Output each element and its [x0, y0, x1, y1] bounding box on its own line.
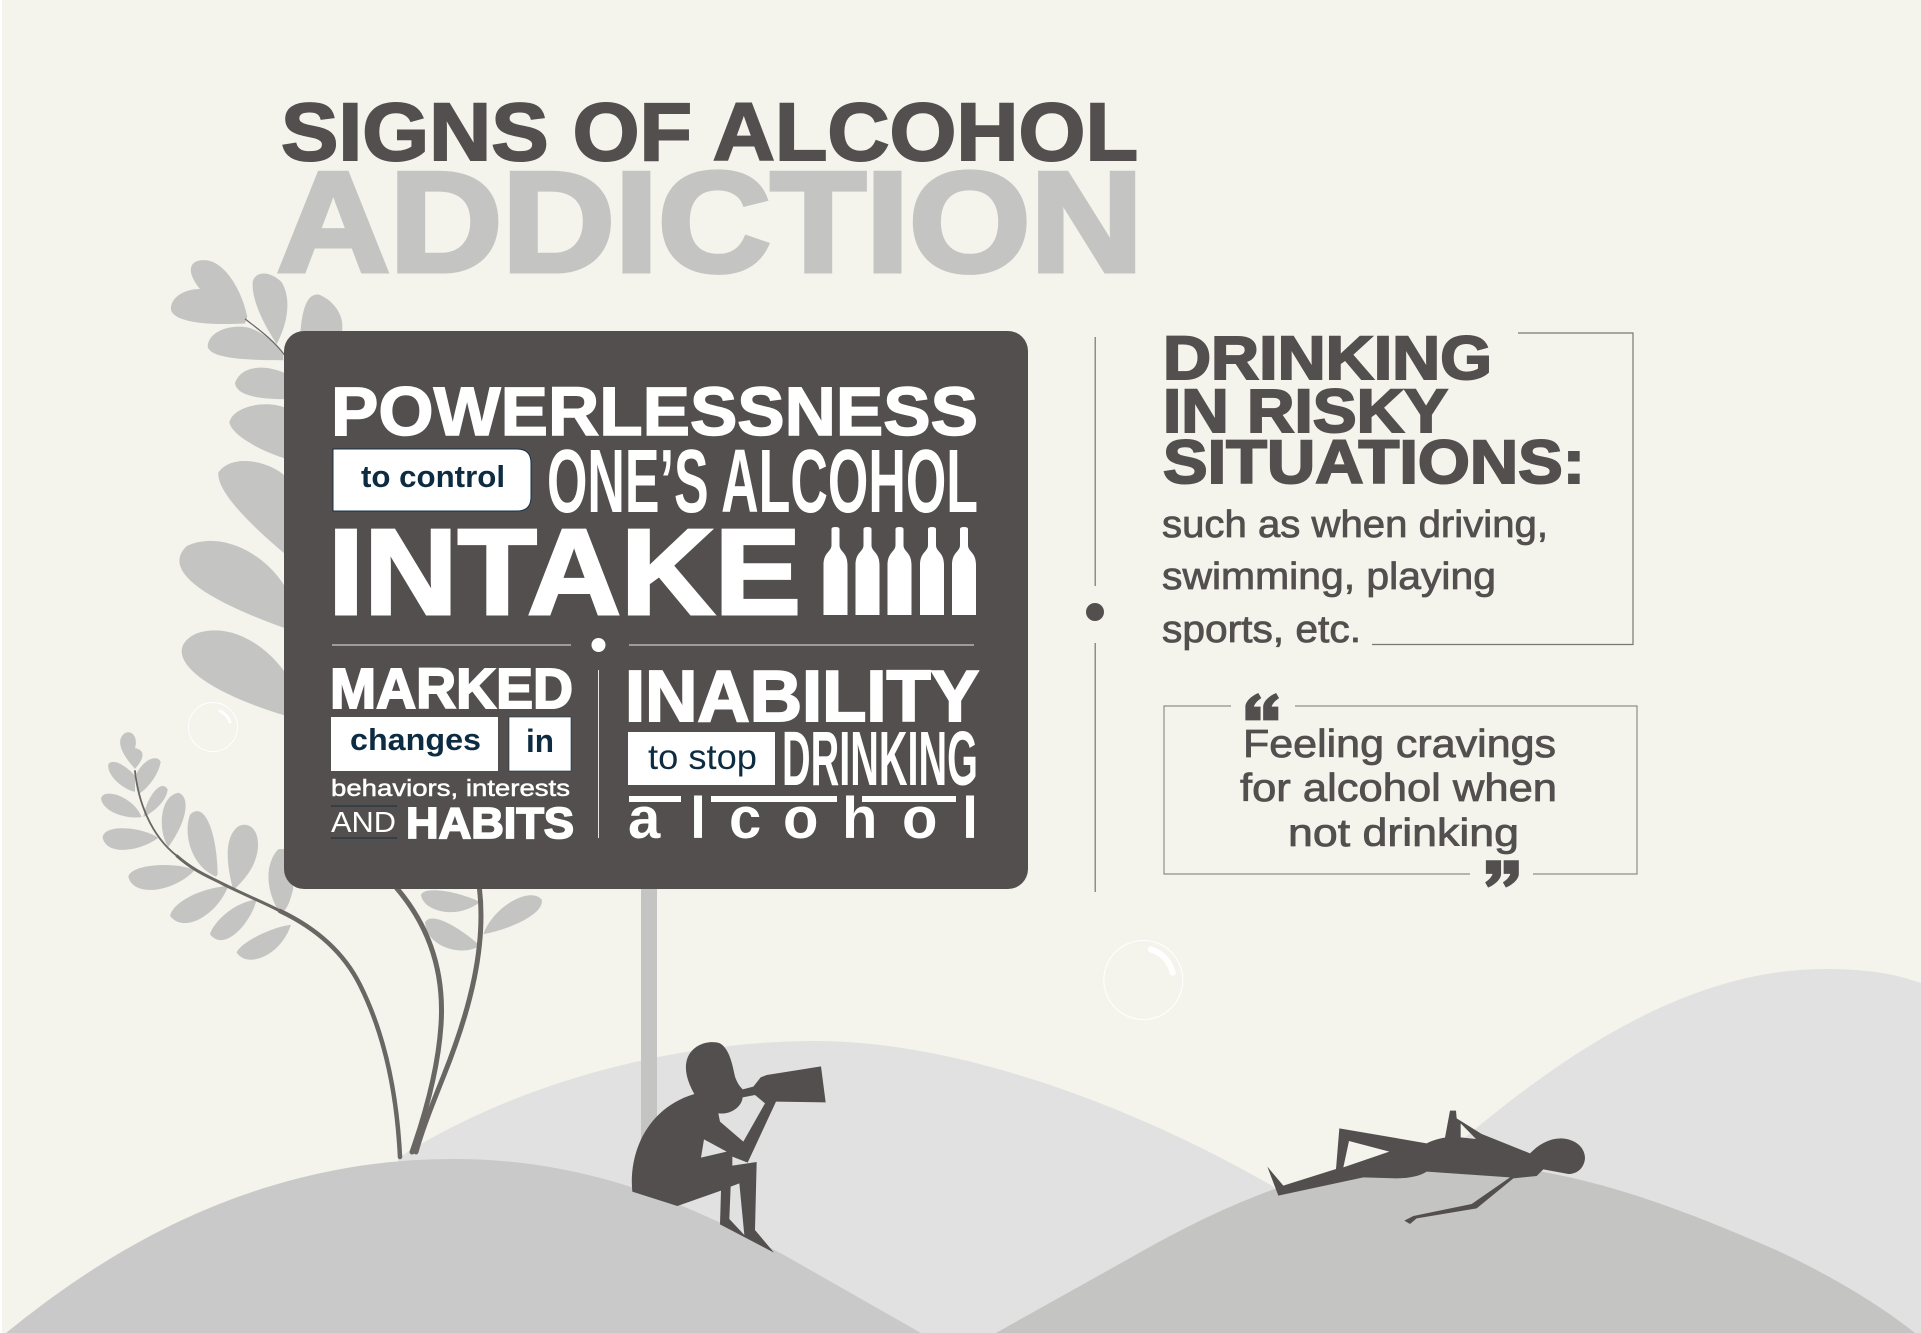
title — [277, 87, 1143, 302]
hill: front right — [996, 1160, 1915, 1333]
body text — [1162, 504, 1548, 651]
quote text — [1240, 723, 1557, 855]
label box: in — [509, 717, 571, 771]
heading: habits: HABITS — [406, 799, 574, 848]
plant: small leaves lower left — [101, 732, 542, 960]
text: and: AND — [331, 807, 396, 839]
divider with dot — [1086, 337, 1104, 892]
hill: front left — [6, 1159, 921, 1333]
heading: inability: INABILITY — [625, 657, 979, 737]
label box: to control: to control — [361, 459, 505, 494]
figure: crouching person drinking — [632, 1042, 826, 1253]
label box: to control — [333, 449, 531, 511]
icon: opening quote — [1245, 693, 1279, 720]
label box: changes: changes — [350, 722, 481, 757]
heading: marked: MARKED — [330, 657, 573, 721]
heading: drinking: DRINKING — [782, 716, 978, 802]
title: ADDICTION — [277, 143, 1143, 302]
heading: powerlessness: POWERLESSNESS — [331, 373, 978, 450]
panel: feeling cravings quote — [1164, 693, 1637, 888]
heading: intake: INTAKE — [328, 504, 801, 640]
hill: back centre — [398, 1041, 1300, 1333]
signpost — [641, 880, 657, 1160]
label box: to stop — [628, 732, 775, 785]
bubble: large — [1104, 940, 1183, 1020]
bubble: small — [188, 702, 238, 752]
heading: DRINKING — [1163, 324, 1492, 392]
body text: such as when driving, — [1162, 504, 1548, 546]
quote text: for alcohol when — [1240, 767, 1557, 810]
body text: swimming, playing — [1162, 556, 1496, 598]
body text: sports, etc. — [1162, 609, 1361, 651]
word: alcohol with overline: alcohol — [628, 786, 978, 851]
icon: five bottles — [824, 527, 976, 615]
plant stems — [135, 771, 481, 1157]
heading: SITUATIONS: — [1163, 428, 1585, 496]
label box: in: in — [526, 723, 554, 759]
quote text: not drinking — [1288, 812, 1519, 855]
text: behaviors, interests: behaviors, interests — [331, 775, 570, 801]
heading: one's alcohol: ONE’S ALCOHOL — [547, 432, 978, 532]
figure: person lying down — [1267, 1111, 1585, 1224]
heading — [1163, 324, 1585, 496]
plant: large leaves behind the sign — [171, 260, 342, 716]
panel: sign board — [284, 331, 1028, 889]
label box: changes — [331, 717, 498, 771]
title: SIGNS OF ALCOHOL — [281, 87, 1138, 178]
panel: drinking in risky situations — [1162, 324, 1633, 651]
quote text: Feeling cravings — [1243, 723, 1556, 766]
label box: to stop: to stop — [648, 738, 757, 777]
hill: back right — [1300, 969, 1921, 1333]
icon: closing quote — [1485, 860, 1519, 888]
heading: IN RISKY — [1163, 377, 1448, 445]
